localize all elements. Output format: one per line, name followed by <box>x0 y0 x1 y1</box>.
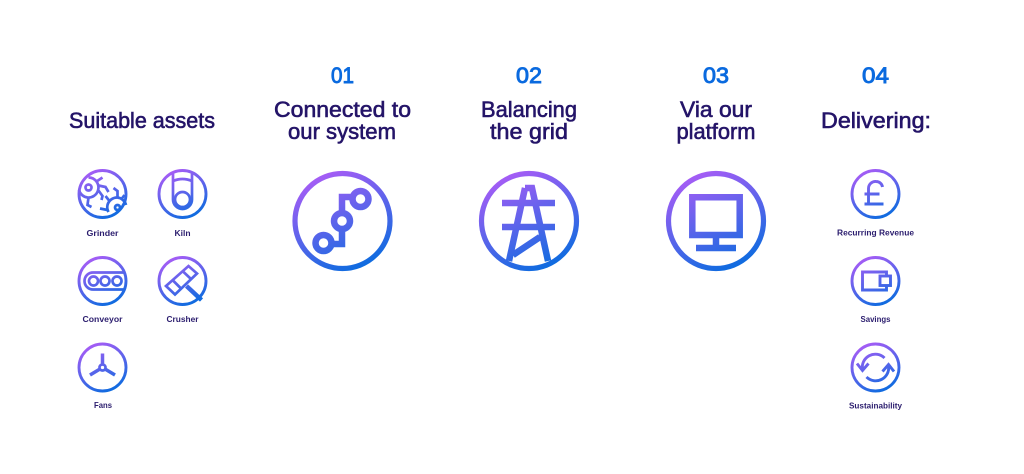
icon: pound <box>852 170 899 218</box>
icon: grinder <box>79 170 126 218</box>
icon: fans <box>79 344 126 391</box>
number 02: 02 <box>516 63 542 88</box>
panel: suitable assets <box>69 108 215 410</box>
icon: crusher <box>159 258 206 304</box>
label: fans: Fans <box>94 400 112 410</box>
number 01: 01 <box>331 63 354 88</box>
icon: pylon <box>482 174 576 268</box>
icon: sustainability <box>852 344 899 391</box>
label: sustainability: Sustainability <box>849 400 902 410</box>
panel: delivering <box>821 63 931 410</box>
panel: step 02 <box>481 63 577 268</box>
heading: delivering: Delivering: <box>821 108 931 133</box>
label: kiln: Kiln <box>174 228 190 238</box>
icon: kiln <box>159 170 206 218</box>
heading line two: platform <box>676 119 756 144</box>
label: conveyor: Conveyor <box>82 314 123 324</box>
heading: via our platform: Via our <box>680 97 752 122</box>
heading line two: the grid <box>490 119 568 144</box>
heading: connected to our system: Connected to <box>274 97 411 122</box>
label: recurring revenue: Recurring Revenue <box>837 228 914 238</box>
label: crusher: Crusher <box>166 314 199 324</box>
label: grinder: Grinder <box>86 228 119 238</box>
heading: balancing the grid: Balancing <box>481 97 577 122</box>
panel: step 03 <box>668 63 764 268</box>
number 03: 03 <box>703 63 729 88</box>
heading line two: our system <box>288 119 396 144</box>
panel: step 01 <box>274 63 411 268</box>
icon: connected nodes <box>295 174 390 268</box>
icon: monitor <box>668 174 764 268</box>
label: savings: Savings <box>860 314 891 324</box>
number 04: 04 <box>862 63 889 88</box>
heading: suitable assets: Suitable assets <box>69 108 215 133</box>
icon: conveyor <box>79 258 126 304</box>
icon: wallet <box>852 258 899 304</box>
